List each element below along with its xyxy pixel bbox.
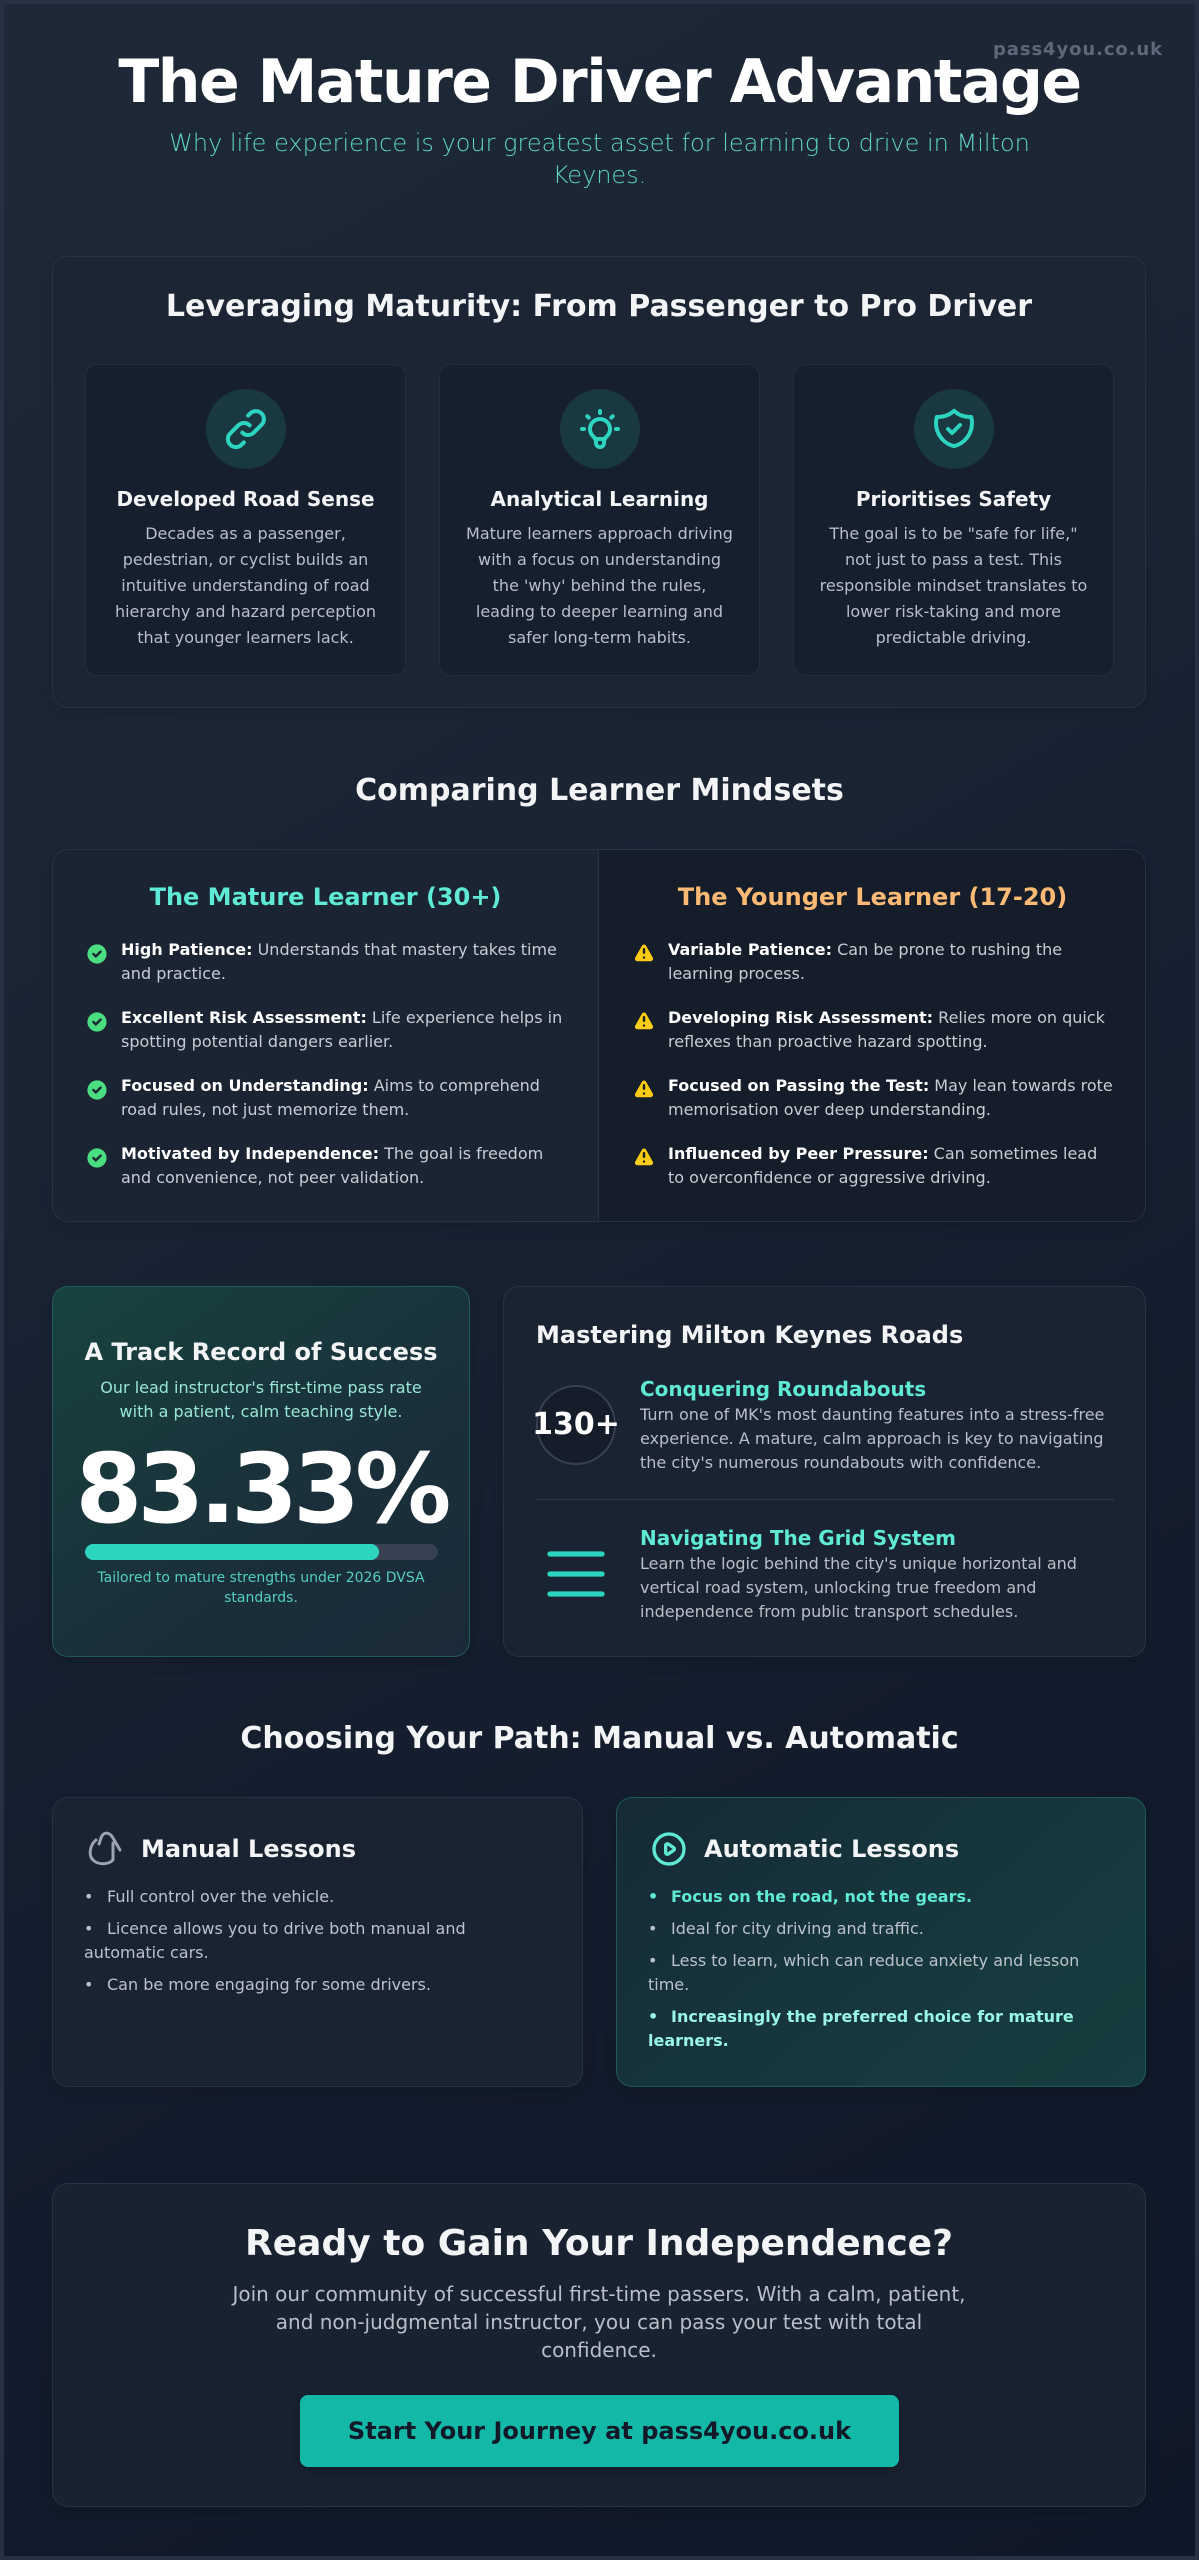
card: analytical learning [439,364,760,676]
bullet: learners. [648,2031,729,2050]
card text [115,524,376,647]
heading: Mastering Milton Keynes Roads [536,1321,963,1349]
card: developed road sense [85,364,406,676]
card text [466,524,733,647]
card text: responsible mindset translates to [820,576,1087,595]
block: navigating the grid system [640,1526,1077,1621]
card title: Manual Lessons [141,1835,356,1863]
item text: Focused on Passing the Test: May lean towards rote [668,1076,1113,1095]
card title: Developed Road Sense [116,487,375,511]
panel: track record of success [52,1286,470,1657]
bullet: Ideal for city driving and traffic. [671,1919,924,1938]
text: experience. A mature, calm approach is key to navigating [640,1429,1104,1448]
bullet: • [84,1887,93,1906]
text: and non-judgmental instructor, you can pass your test with total [276,2310,922,2334]
text: the city's numerous roundabouts with confidence. [640,1453,1041,1472]
heading: Ready to Gain Your Independence? [245,2223,953,2264]
heading: A Track Record of Success [84,1338,438,1366]
list item [634,1144,1097,1187]
list item [634,1008,1105,1051]
panel: leveraging maturity [52,256,1146,708]
bullet: Full control over the vehicle. [107,1887,334,1906]
heading: leveraging maturity: Leveraging Maturity: From Passenger to Pro Driver [166,289,1032,324]
heading: mature learner: The Mature Learner (30+) [150,883,501,911]
subheading: Navigating The Grid System [640,1526,956,1550]
card text: Mature learners approach driving [466,524,733,543]
item text: Influenced by Peer Pressure: Can sometimes lead [668,1144,1097,1163]
icon: warning [634,944,654,962]
text: Learn the logic behind the city's unique horizontal and [640,1554,1077,1573]
bullet: automatic cars. [84,1943,209,1962]
progress bar [85,1544,438,1560]
text: Turn one of MK's most daunting features into a stress-free [640,1405,1104,1424]
item text [668,1008,1105,1051]
badge number: 130+ [532,1407,620,1442]
item text [668,1144,1097,1187]
card text: the 'why' behind the rules, [493,576,706,595]
panel: mastering milton keynes roads [503,1286,1146,1657]
card title: Prioritises Safety [856,487,1051,511]
bullet: • [648,1887,658,1906]
bullet: Licence allows you to drive both manual and [107,1919,466,1938]
icon: play [649,1829,689,1869]
card text: leading to deeper learning and [476,602,723,621]
icon: check [87,1080,107,1100]
panel: mindset comparison [52,849,1146,1222]
description: Our lead instructor's first-time pass rate [100,1378,422,1397]
item text: learning process. [668,964,805,983]
bullet: • [648,1919,657,1938]
stat: pass rate: 83.33% [75,1433,447,1545]
list item [87,1076,540,1119]
subheading: Conquering Roundabouts [640,1377,926,1401]
icon: warning [634,1148,654,1166]
icon: warning [634,1012,654,1030]
heading: younger learner: The Younger Learner (17-20) [678,883,1067,911]
bullet [648,2005,1074,2053]
heading: choosing your path: Choosing Your Path: Manual vs. Automatic [240,1721,959,1756]
bullet: Focus on the road, not the gears. [671,1887,972,1906]
item text: Variable Patience: Can be prone to rushing the [668,940,1062,959]
note: Tailored to mature strengths under 2026 DVSA [97,1570,425,1586]
item text: and practice. [121,964,226,983]
icon: link [206,389,286,469]
bullet: time. [648,1975,689,1994]
description [100,1378,422,1421]
card text: The goal is to be "safe for life," [829,524,1078,543]
card title: Analytical Learning [490,487,708,511]
progress fill [85,1544,379,1560]
item text: Focused on Understanding: Aims to comprehend [121,1076,540,1095]
bullet [648,1949,1079,1997]
subtitle: Why life experience is your greatest asset for learning to drive in Milton [169,129,1030,157]
card text: Decades as a passenger, [145,524,346,543]
icon: check [87,944,107,964]
item text: Motivated by Independence: The goal is freedom [121,1144,543,1163]
item text: road rules, not just memorize them. [121,1100,409,1119]
bullet list [648,1885,1138,2065]
description: with a patient, calm teaching style. [120,1402,402,1421]
item text: Excellent Risk Assessment: Life experience helps in [121,1008,562,1027]
panel: manual lessons [52,1797,583,2087]
card: prioritises safety [793,364,1114,676]
card text: predictable driving. [876,628,1031,647]
item text [121,940,557,983]
title: The Mature Driver Advantage [118,47,1081,117]
bullet: • [648,2007,658,2026]
button label: Start Your Journey at pass4you.co.uk [348,2417,851,2445]
item text [121,1008,562,1051]
item text [121,1144,543,1187]
card text: hierarchy and hazard perception [115,602,376,621]
list item [87,1144,543,1187]
bullet: • [84,1975,93,1994]
icon: check [87,1148,107,1168]
note: standards. [224,1590,298,1606]
card text: lower risk-taking and more [846,602,1061,621]
item text: High Patience: Understands that mastery takes time [121,940,557,959]
item text: reflexes than proactive hazard spotting. [668,1032,988,1051]
item text: Developing Risk Assessment: Relies more on quick [668,1008,1105,1027]
column: younger learner background [598,849,1146,1222]
card text: with a focus on understanding [478,550,721,569]
icon: warning [634,1080,654,1098]
icon: 130+ badge [536,1385,616,1465]
bullet [84,1919,466,1962]
text [640,1554,1077,1621]
note [97,1570,425,1606]
list item [634,1076,1113,1119]
icon: manual [88,1832,122,1866]
list item [87,940,557,983]
icon: shield check [914,389,994,469]
card title: Automatic Lessons [704,1835,959,1863]
item text [668,1076,1113,1119]
icon: light bulb [560,389,640,469]
text: vertical road system, unlocking true freedom and [640,1578,1036,1597]
bullet: Increasingly the preferred choice for mature [671,2007,1074,2026]
item text: to overconfidence or aggressive driving. [668,1168,991,1187]
card text: pedestrian, or cyclist builds an [123,550,368,569]
icon: grid lines [547,1551,605,1597]
text [640,1405,1104,1472]
item text: spotting potential dangers earlier. [121,1032,393,1051]
bullet: Can be more engaging for some drivers. [107,1975,431,1994]
card text: safer long-term habits. [508,628,691,647]
text [52,2280,1146,2364]
panel: call to action [52,2183,1146,2507]
text: independence from public transport schedules. [640,1602,1018,1621]
card text: not just to pass a test. This [845,550,1062,569]
bullet list [84,1887,466,1994]
subtitle [169,129,1030,189]
subtitle: Keynes. [553,161,646,189]
card text: that younger learners lack. [137,628,354,647]
card text [820,524,1087,647]
heading: comparing learner mindsets: Comparing Learner Mindsets [355,773,844,808]
brand watermark: pass4you.co.uk [993,39,1163,60]
text: confidence. [541,2338,657,2362]
list item [634,940,1062,983]
bullet: • [648,1951,657,1970]
list item [87,1008,562,1051]
item text: and convenience, not peer validation. [121,1168,424,1187]
card text: intuitive understanding of road [121,576,370,595]
block: conquering roundabouts [640,1377,1104,1472]
item text: memorisation over deep understanding. [668,1100,991,1119]
text: Join our community of successful first-time passers. With a calm, patient, [232,2282,966,2306]
item text [121,1076,540,1119]
button [300,2395,899,2467]
item text [668,940,1062,983]
panel: automatic lessons [616,1797,1146,2087]
bullet: • [84,1919,93,1938]
bullet: Less to learn, which can reduce anxiety and lesson [671,1951,1079,1970]
icon: check [87,1012,107,1032]
